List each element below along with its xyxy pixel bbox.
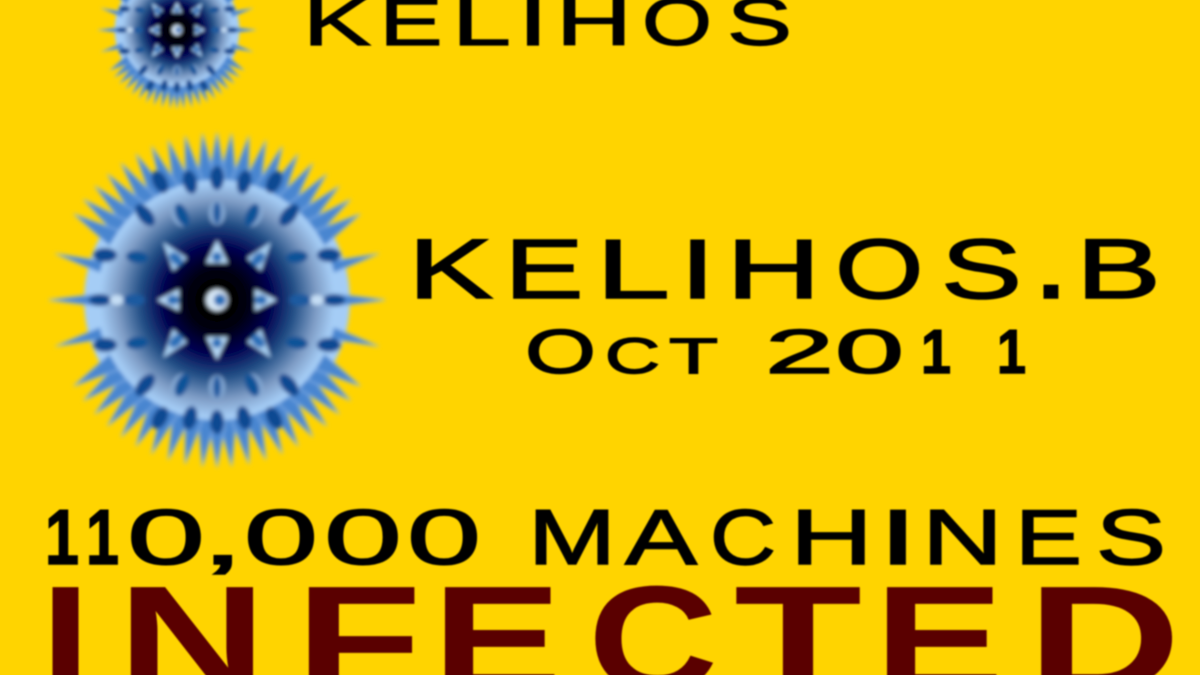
label: Oct 2011: 1 bbox=[921, 318, 951, 387]
headline: 110,000 machines: N bbox=[922, 493, 1003, 581]
label: KELIHOS.B bbox=[408, 222, 1161, 316]
label: Oct 2011: 1 bbox=[997, 318, 1026, 387]
headline: 110,000 machines: S bbox=[1096, 493, 1166, 581]
headline: infected bbox=[40, 554, 1181, 675]
headline: 110,000 machines: C bbox=[710, 493, 776, 581]
label: KELIHOS.B: O bbox=[835, 222, 924, 316]
label: Oct 2011: T bbox=[669, 328, 718, 384]
headline: 110,000 machines: 0 bbox=[407, 493, 481, 581]
headline: 110,000 machines: , bbox=[200, 493, 245, 581]
label: KELIHOS.B: H bbox=[726, 222, 821, 316]
headline: 110,000 machines: 1 bbox=[86, 493, 119, 581]
label: Oct 2011: 2 bbox=[765, 318, 834, 387]
headline: 110,000 machines: H bbox=[790, 493, 873, 581]
headline: 110,000 machines: I bbox=[878, 493, 918, 581]
headline: 110,000 machines: A bbox=[625, 493, 697, 581]
label: KELIHOS.B: B bbox=[1076, 222, 1161, 316]
headline: 110,000 machines: 1 bbox=[45, 493, 79, 581]
label: KELIHOS.B: E bbox=[504, 222, 584, 316]
label: KELIHOS.B: S bbox=[941, 222, 1022, 316]
label: KELIHOS.B: I bbox=[680, 222, 716, 316]
icon: large virus (Kelihos.B) bbox=[49, 133, 385, 467]
headline: 110,000 machines: M bbox=[528, 493, 616, 581]
headline: 110,000 machines: 0 bbox=[324, 493, 402, 581]
label: Oct 2011: O bbox=[525, 318, 596, 387]
label: Oct 2011 bbox=[525, 318, 1026, 387]
label: KELIHOS bbox=[303, 0, 792, 60]
headline: 110,000 machines: E bbox=[1015, 493, 1082, 581]
label: Oct 2011: 0 bbox=[835, 318, 904, 387]
label: Oct 2011: C bbox=[605, 328, 660, 384]
label: KELIHOS.B: . bbox=[1038, 222, 1064, 316]
label: KELIHOS.B: L bbox=[596, 222, 670, 316]
headline: 110,000 machines: 0 bbox=[244, 493, 318, 581]
headline: 110,000 machines: 0 bbox=[127, 493, 205, 581]
icon: small virus (Kelihos) bbox=[98, 0, 256, 109]
label: KELIHOS.B: K bbox=[408, 222, 493, 316]
headline: 110,000 machines bbox=[45, 493, 1166, 581]
